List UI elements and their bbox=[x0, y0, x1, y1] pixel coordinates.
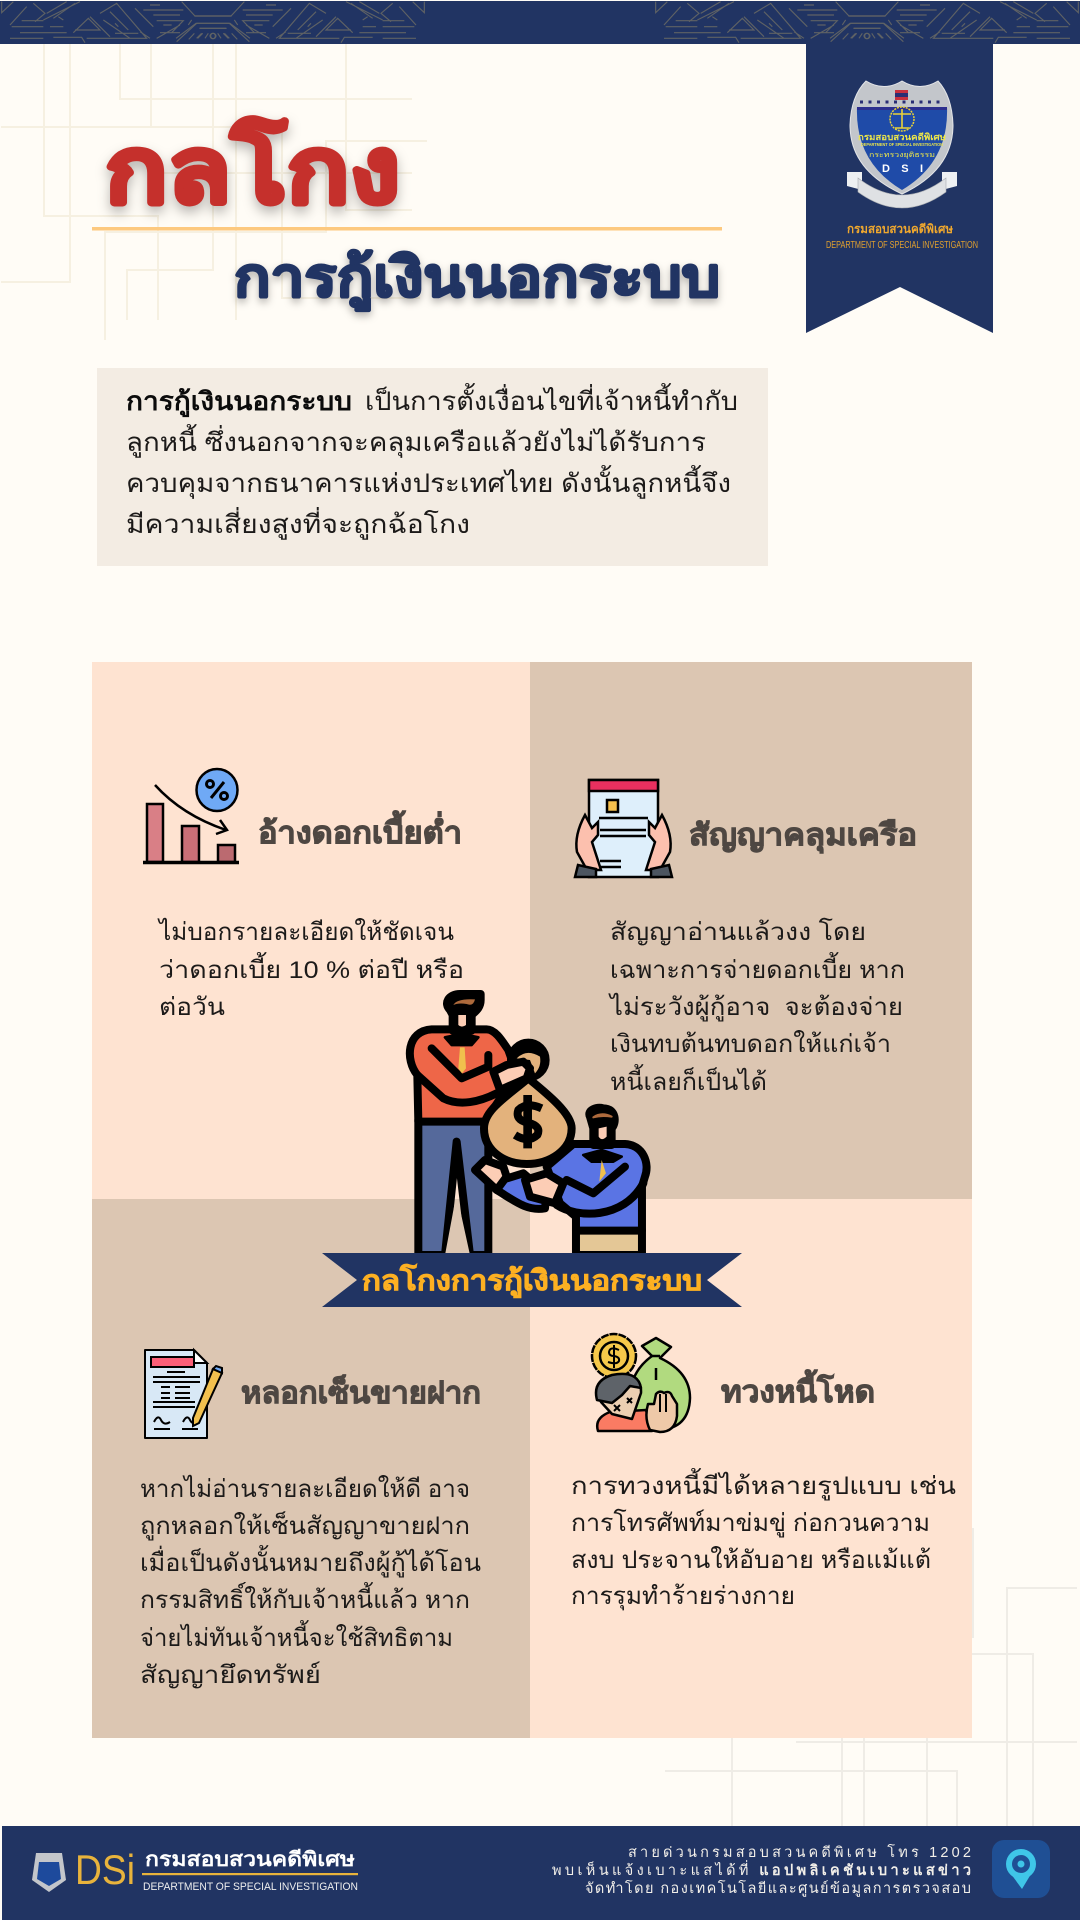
body text: ถูกหลอกให้เซ็นสัญญาขายฝาก bbox=[140, 1510, 470, 1541]
body text: ต่อวัน bbox=[159, 994, 225, 1021]
body text: กรรมสิทธิ์ให้กับเจ้าหนี้แล้ว หาก bbox=[140, 1582, 470, 1614]
logo ribbon bbox=[806, 44, 993, 333]
definition text: ควบคุมจากธนาคารแห่งประเทศไทย ดังนั้นลูกหนี้จึง bbox=[126, 465, 731, 499]
panel: definition bbox=[97, 368, 768, 566]
body text: การโทรศัพท์มาข่มขู่ ก่อกวนความ bbox=[571, 1509, 930, 1538]
man giving money bbox=[410, 994, 517, 1255]
body text bbox=[608, 918, 905, 1096]
footer hotline text bbox=[552, 1843, 971, 1897]
icon: tip-off app bbox=[992, 1840, 1050, 1898]
body text: หนี้เลยก็เป็นได้ bbox=[610, 1064, 767, 1096]
money bag bbox=[484, 1043, 572, 1164]
icon: DSI shield logo: D S I bbox=[882, 163, 923, 175]
footer hotline text: สายด่วนกรมสอบสวนคดีพิเศษ โทร 1202 bbox=[628, 1843, 971, 1861]
panel: card sale with right of redemption bbox=[92, 1199, 530, 1738]
heading: ทวงหนี้โหด bbox=[721, 1369, 875, 1409]
body text bbox=[140, 1475, 481, 1689]
banner: section title bbox=[322, 1253, 742, 1307]
definition text: ลูกหนี้ ซึ่งนอกจากจะคลุมเครือแล้วยังไม่ได้รับการ bbox=[126, 424, 706, 458]
banner: section title: กลโกงการกู้เงินนอกระบบ bbox=[362, 1263, 702, 1298]
man receiving money bbox=[475, 1108, 647, 1255]
icon: DSI shield logo bbox=[847, 81, 957, 208]
body text: ว่าดอกเบี้ย 10 % ต่อปี หรือ bbox=[159, 952, 464, 984]
footer hotline text: จัดทำโดย กองเทคโนโลยีและศูนย์ข้อมูลการตรวจสอบ bbox=[585, 1879, 971, 1897]
icon: DSI shield logo: กระทรวงยุติธรรม bbox=[869, 151, 935, 159]
body text: เฉพาะการจ่ายดอกเบี้ย หาก bbox=[610, 952, 905, 984]
body text: สัญญาอ่านแล้วงง โดย bbox=[610, 918, 866, 946]
footer logo: DEPARTMENT OF SPECIAL INVESTIGATION bbox=[143, 1881, 358, 1893]
icon: DSI shield logo: กรมสอบสวนคดีพิเศษ bbox=[858, 132, 946, 142]
body text: การทวงหนี้มีได้หลายรูปแบบ เช่น bbox=[571, 1468, 956, 1501]
ribbon English label: DEPARTMENT OF SPECIAL INVESTIGATION bbox=[826, 239, 978, 251]
body text: สัญญายึดทรัพย์ bbox=[140, 1661, 321, 1689]
body text bbox=[157, 918, 464, 1021]
definition text: มีความเสี่ยงสูงที่จะถูกฉ้อโกง bbox=[126, 507, 470, 540]
body text: จ่ายไม่ทันเจ้าหนี้จะใช้สิทธิตาม bbox=[140, 1620, 453, 1652]
ribbon Thai label: กรมสอบสวนคดีพิเศษ bbox=[847, 222, 953, 236]
footer logo: DSi bbox=[75, 1846, 135, 1893]
body text: เมื่อเป็นดังนั้นหมายถึงผู้กู้ได้โอน bbox=[140, 1545, 481, 1578]
body text: หากไม่อ่านรายละเอียดให้ดี อาจ bbox=[140, 1475, 470, 1503]
icon: DSI shield logo: DEPARTMENT OF SPECIAL INVESTIGATION bbox=[861, 142, 943, 147]
icon: stressed debtor with coin and bag bbox=[592, 1334, 690, 1432]
icon: hands holding contract bbox=[575, 780, 672, 877]
body text bbox=[571, 1468, 956, 1611]
body text: เงินทบต้นทบดอกให้แก่เจ้า bbox=[610, 1030, 891, 1058]
footer logo bbox=[32, 1846, 358, 1893]
definition text bbox=[126, 383, 738, 540]
definition text: การกู้เงินนอกระบบ bbox=[126, 388, 352, 418]
subtitle: การกู้เงินนอกระบบ bbox=[234, 248, 720, 311]
heading: หลอกเซ็นขายฝาก bbox=[241, 1374, 481, 1410]
icon: falling bar chart with percent bbox=[143, 769, 239, 862]
top header band bbox=[0, 1, 1080, 44]
title: กลโกง bbox=[105, 117, 400, 222]
panel: card low interest bbox=[92, 662, 530, 1199]
body text: ไม่ระวังผู้กู้อาจ จะต้องจ่าย bbox=[608, 993, 903, 1022]
footer logo: กรมสอบสวนคดีพิเศษ bbox=[145, 1848, 355, 1871]
body text: การรุมทำร้ายร่างกาย bbox=[571, 1583, 795, 1611]
heading: อ้างดอกเบี้ยต่ำ bbox=[258, 810, 462, 850]
icon: document and pen bbox=[145, 1350, 222, 1438]
panel: card aggressive debt collection bbox=[530, 1199, 972, 1738]
footer hotline text: พบเห็นแจ้งเบาะแสได้ที่ แอปพลิเคชันเบาะแสข่าว bbox=[552, 1860, 971, 1879]
body text: ไม่บอกรายละเอียดให้ชัดเจน bbox=[157, 918, 454, 946]
body text: สงบ ประจานให้อับอาย หรือแม้แต้ bbox=[571, 1546, 931, 1574]
footer bbox=[2, 1826, 1080, 1920]
illustration: two men exchanging a money bag bbox=[410, 994, 647, 1255]
definition text: เป็นการตั้งเงื่อนไขที่เจ้าหนี้ทำกับ bbox=[365, 383, 738, 416]
panel: card ambiguous contract bbox=[530, 662, 972, 1199]
heading: สัญญาคลุมเครือ bbox=[689, 819, 917, 854]
